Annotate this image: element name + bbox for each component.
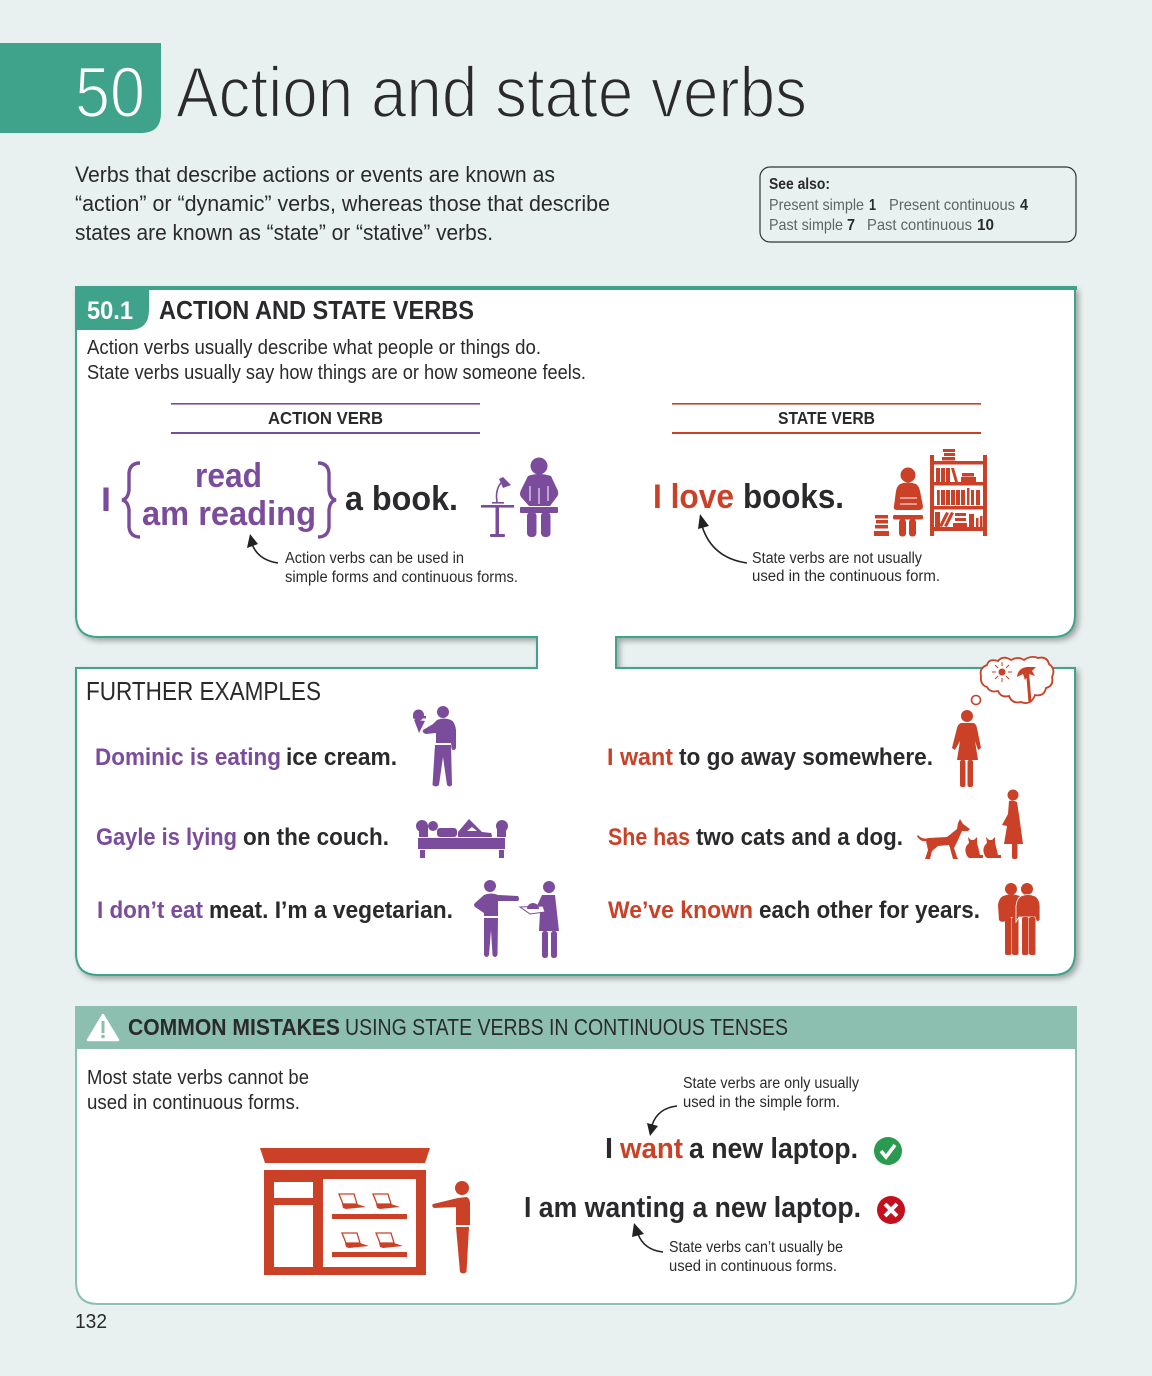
correct sentence: a new laptop. [689, 1133, 858, 1165]
note: continuous forms [669, 1239, 843, 1275]
state note: used in the continuous form. [752, 568, 940, 585]
section heading: ACTION AND STATE VERBS [159, 295, 474, 325]
icon: man with ice cream [413, 706, 456, 786]
mistakes description: used in continuous forms. [87, 1092, 300, 1114]
panel outline [76, 1007, 1076, 1304]
note: simple form [683, 1075, 859, 1111]
intro text: “action” or “dynamic” verbs, whereas those that describe [75, 191, 610, 216]
section description [87, 337, 586, 384]
state verb example sentence: I love [653, 478, 734, 516]
see also box: 1 [869, 197, 876, 214]
icon: person with bookshelf [874, 449, 987, 536]
example: She has: She has [608, 824, 690, 851]
correct sentence: want [619, 1133, 683, 1165]
example: We've known: each other for years. [759, 897, 980, 924]
intro text: Verbs that describe actions or events are known as [75, 162, 555, 187]
example: Gayle: on the couch. [243, 824, 389, 851]
section tab [75, 286, 149, 330]
number tab [0, 43, 161, 133]
example: Dominic: ice cream. [286, 744, 397, 771]
arrow: state note [698, 514, 747, 563]
see also box: 10 [977, 217, 994, 234]
further examples heading: FURTHER EXAMPLES [86, 676, 321, 706]
see also box: Past simple [769, 217, 843, 234]
icon: person lying on couch [416, 819, 508, 858]
action verb example sentence [101, 457, 458, 537]
illustration: laptop shop with person [260, 1148, 470, 1275]
mistakes description: Most state verbs cannot be [87, 1067, 309, 1089]
header bar: COMMON MISTAKES [128, 1014, 340, 1040]
header bar: USING STATE VERBS IN CONTINUOUS TENSES [345, 1014, 788, 1040]
note: simple form: used in the simple form. [683, 1094, 840, 1111]
example: Dominic: Dominic is eating [95, 744, 281, 771]
see also box [760, 167, 1076, 242]
arrow: continuous note [632, 1223, 663, 1252]
title banner [0, 43, 807, 133]
correct sentence [605, 1133, 858, 1165]
see also box: Present simple [769, 197, 864, 214]
correct sentence: I [605, 1133, 613, 1165]
action note: simple forms and continuous forms. [285, 569, 518, 586]
example: She has [608, 824, 903, 851]
header bar [76, 1007, 1077, 1049]
top rule [75, 286, 1077, 290]
example: I want: to go away somewhere. [679, 744, 933, 771]
title: Action and state verbs [176, 54, 807, 133]
chapter number: 50 [75, 54, 145, 133]
action verb example sentence: a book. [345, 480, 458, 518]
see also box: Past continuous [867, 217, 972, 234]
example: I want: I want [607, 744, 673, 771]
icon: cross mark [877, 1196, 905, 1224]
see also box: 4 [1020, 197, 1028, 214]
section tab: 50.1 [87, 297, 133, 325]
note: continuous forms: State verbs can’t usually be [669, 1239, 843, 1256]
state verb heading: STATE VERB [778, 408, 875, 428]
intro text [75, 162, 610, 245]
section description: Action verbs usually describe what people or things do. [87, 337, 541, 359]
state verb example sentence [653, 478, 844, 516]
example: We've known [608, 897, 980, 924]
action verb example sentence: read [195, 457, 262, 495]
arrow: simple form note [647, 1106, 677, 1136]
action note [285, 550, 518, 586]
icon: woman [952, 710, 981, 787]
page number: 132 [75, 1311, 107, 1333]
intro text: states are known as “state” or “stative” verbs. [75, 220, 493, 245]
icon: woman with dog and two cats [917, 790, 1023, 859]
mistakes description [87, 1067, 309, 1114]
icon: man refusing food from woman [474, 880, 559, 958]
action verb heading: ACTION VERB [268, 408, 383, 428]
example: vegetarian: I don’t eat [97, 897, 203, 924]
action note: Action verbs can be used in [285, 550, 464, 567]
example: We've known: We’ve known [608, 897, 753, 924]
example: She has: two cats and a dog. [696, 824, 903, 851]
example: Gayle: Gayle is lying [96, 824, 237, 851]
example: vegetarian: meat. I’m a vegetarian. [209, 897, 453, 924]
state note [752, 550, 940, 585]
icon: warning triangle [88, 1015, 118, 1040]
see also box: See also: [769, 176, 830, 193]
incorrect sentence: I am wanting a new laptop. [524, 1192, 861, 1224]
action verb example sentence: am reading [142, 495, 316, 533]
example: vegetarian [97, 897, 453, 924]
see also box: Present continuous [889, 197, 1015, 214]
example: Gayle [96, 824, 389, 851]
panel outline [76, 288, 1075, 975]
note: simple form: State verbs are only usually [683, 1075, 859, 1092]
note: continuous forms: used in continuous forms. [669, 1258, 837, 1275]
section description: State verbs usually say how things are or how someone feels. [87, 362, 586, 384]
icon: thought bubble with sun and palm [972, 657, 1053, 704]
action verb example sentence: I [101, 481, 111, 519]
arrow: action note [247, 534, 278, 563]
icon: check mark [874, 1137, 902, 1165]
see also box: 7 [847, 217, 855, 234]
panel: action and state verbs with further examples [75, 286, 1077, 975]
state verb example sentence: books. [743, 478, 844, 516]
icon: couple embracing [998, 883, 1040, 955]
icon: person reading at table [481, 458, 558, 537]
example: Dominic [95, 744, 397, 771]
state note: State verbs are not usually [752, 550, 922, 567]
panel: common mistakes [76, 1007, 1077, 1304]
